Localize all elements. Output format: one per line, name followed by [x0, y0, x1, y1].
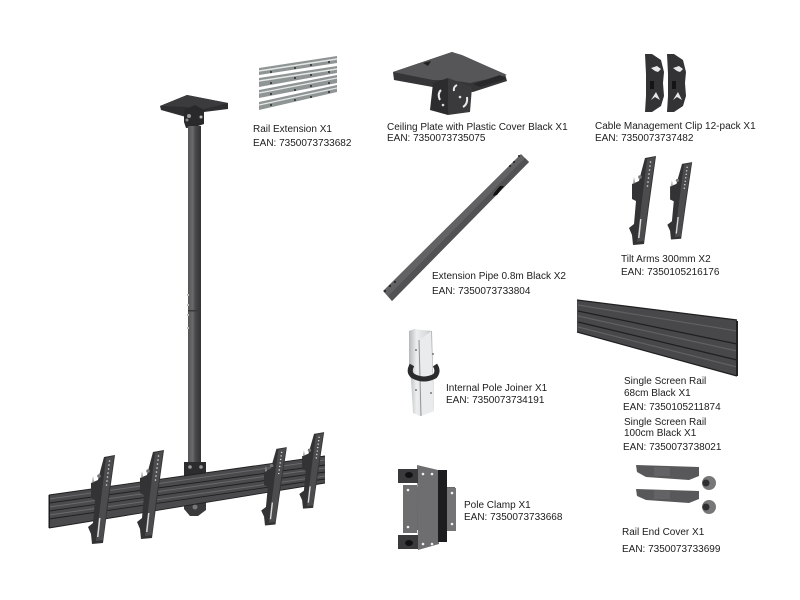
- label: single screen rail 68cm: EAN: 7350105211874: [623, 402, 721, 413]
- icon: cable clips: [645, 54, 686, 112]
- label: rail end cover: Rail End Cover X1: [622, 527, 704, 538]
- pole clamp on rail: [184, 462, 206, 516]
- product: rail end cover: [622, 465, 721, 555]
- product: rail extension: [253, 56, 352, 149]
- product: single screen rails: [577, 300, 738, 453]
- label: single screen rail 68cm: 68cm Black X1: [624, 388, 691, 399]
- label: rail extension: Rail Extension X1: [253, 124, 332, 135]
- label: cable management clip: Cable Management Clip 12-pack X1: [595, 121, 756, 132]
- label: single screen rail 100cm: EAN: 7350073738021: [623, 442, 722, 453]
- icon: rail end covers and screws: [636, 465, 716, 514]
- icon: rail extension bars: [259, 56, 337, 110]
- icon: tilt arms: [629, 156, 692, 245]
- product: ceiling plate: [387, 52, 568, 144]
- label: tilt arms: Tilt Arms 300mm X2: [621, 254, 711, 265]
- product: extension pipe: [383, 154, 566, 301]
- icon: extension pipe: [383, 154, 529, 301]
- tilt arms on rail: [88, 432, 324, 544]
- label: single screen rail 68cm: Single Screen Rail: [624, 376, 706, 387]
- label: single screen rail 100cm: 100cm Black X1: [624, 428, 697, 439]
- label: pole clamp: Pole Clamp X1: [464, 500, 531, 511]
- label: extension pipe: EAN: 7350073733804: [432, 286, 531, 297]
- label: cable management clip: EAN: 7350073737482: [595, 133, 694, 144]
- label: rail end cover: EAN: 7350073733699: [622, 544, 721, 555]
- label: pole clamp: EAN: 7350073733668: [464, 512, 563, 523]
- icon: pole clamp: [398, 465, 456, 550]
- product: internal pole joiner: [409, 329, 548, 416]
- ceiling plate on assembled mount: [160, 95, 228, 128]
- icon: single screen rail: [577, 300, 738, 376]
- label: pole joiner: Internal Pole Joiner X1: [446, 383, 547, 394]
- label: single screen rail 100cm: Single Screen Rail: [624, 417, 706, 428]
- long rail: [48, 456, 325, 528]
- label: pole joiner: EAN: 7350073734191: [446, 395, 545, 406]
- product: pole clamp: [398, 465, 563, 550]
- icon: pole joiner: [409, 329, 437, 416]
- label: ceiling plate: Ceiling Plate with Plastic Cover Black X1: [387, 122, 568, 133]
- label: tilt arms: EAN: 7350105216176: [621, 267, 720, 278]
- product: cable management clip: [595, 54, 756, 144]
- label: extension pipe: Extension Pipe 0.8m Black X2: [432, 271, 566, 282]
- label: rail extension: EAN: 7350073733682: [253, 138, 352, 149]
- product: tilt arms: [621, 156, 720, 278]
- product: assembled ceiling mount: [48, 95, 325, 544]
- icon: ceiling plate: [393, 52, 507, 115]
- label: ceiling plate: EAN: 7350073735075: [387, 133, 486, 144]
- pole: [188, 126, 201, 466]
